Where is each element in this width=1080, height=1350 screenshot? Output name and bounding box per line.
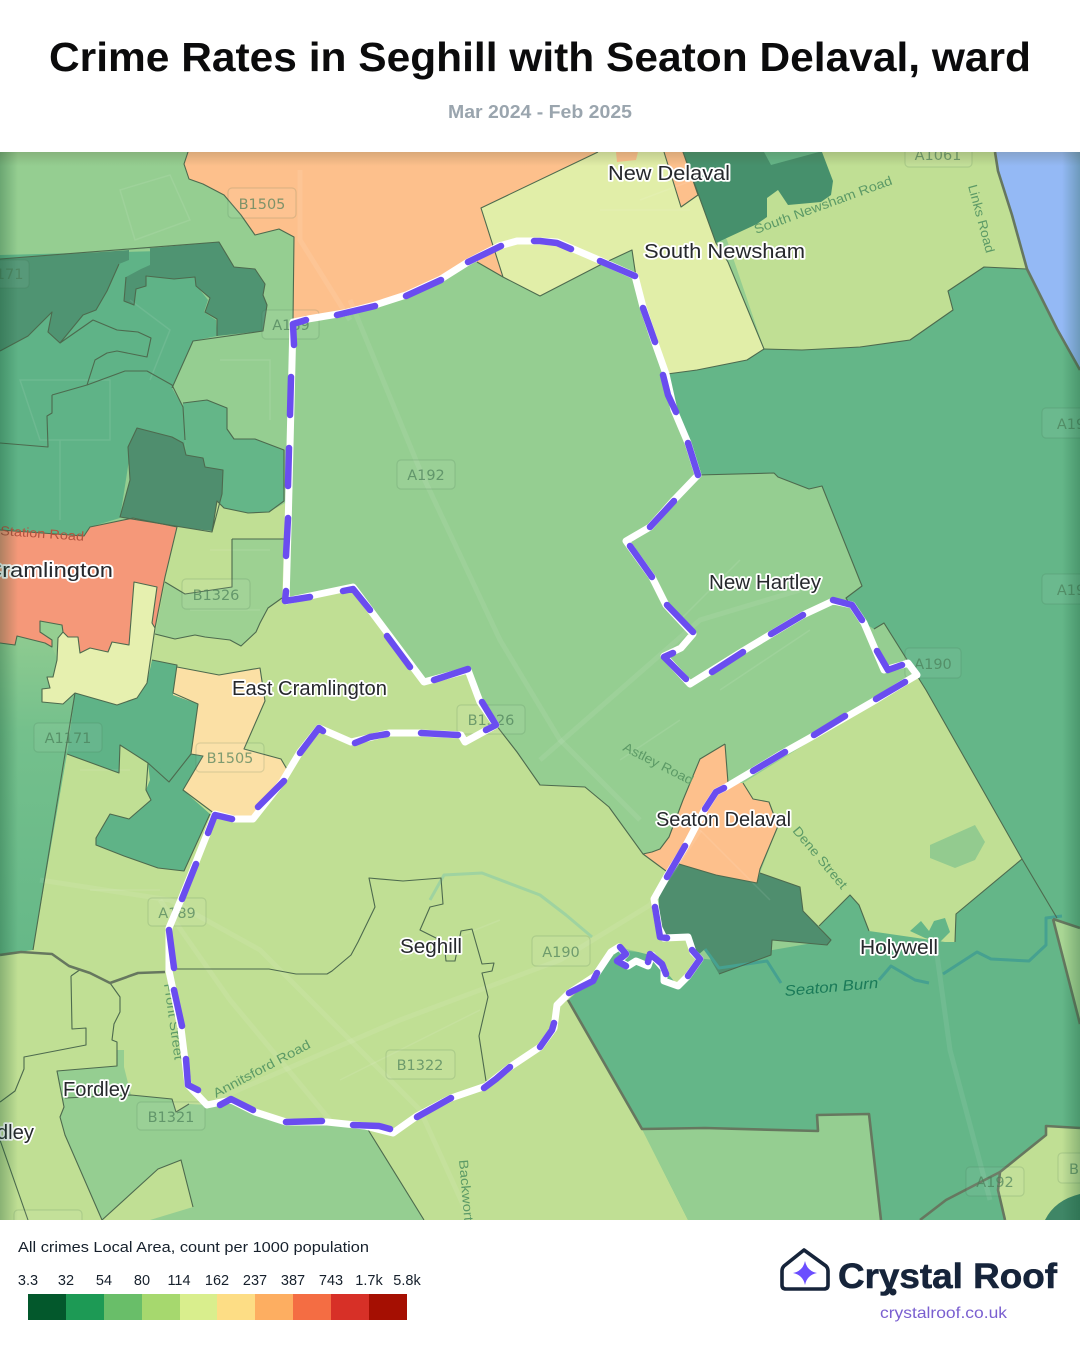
- east edge pale patch: [1055, 921, 1080, 1018]
- place labels: New Hartley: [709, 572, 821, 594]
- north-east pale area: [726, 152, 1026, 350]
- legend: [18, 1240, 421, 1320]
- legend title: All crimes Local Area, count per 1000 population: [18, 1240, 369, 1256]
- rivers: [430, 873, 1062, 983]
- title: Crime Rates in Seghill with Seaton Delaval, ward: [49, 34, 1031, 80]
- north-west dark green: [0, 242, 267, 351]
- road number shields: A189: [158, 906, 196, 922]
- road number shields: A192: [976, 1175, 1014, 1191]
- road number shields: B1321: [148, 1110, 194, 1126]
- legend scale labels: [18, 1273, 421, 1289]
- Seghill ward and western pale green: [0, 501, 700, 1220]
- wordmark: Crystal Roof: [838, 1257, 1057, 1296]
- east green area: [568, 267, 1080, 1220]
- road number shields: B: [1069, 1162, 1079, 1178]
- road number shields: A190: [542, 945, 580, 961]
- road number shields: A189: [272, 318, 310, 334]
- Cramlington dark green block: [120, 428, 223, 532]
- lake near Holywell: [930, 825, 985, 868]
- Cramlington medium green block: [183, 400, 284, 512]
- icon: house with star: [782, 1250, 828, 1289]
- dark corner patch: [1045, 1194, 1080, 1220]
- road name labels: [0, 173, 998, 1230]
- road name labels: Annitsford Road: [210, 1037, 313, 1101]
- legend colour bar: [28, 1294, 407, 1320]
- legend scale labels: 387: [281, 1273, 305, 1289]
- place labels: South Newsham: [644, 241, 805, 263]
- road name labels: Links Road: [965, 183, 998, 254]
- cream area East Cramlington: [173, 667, 288, 818]
- road number shields: B1505: [207, 751, 253, 767]
- north orange area: [184, 152, 598, 322]
- road name labels: Seaton Burn: [784, 975, 879, 1000]
- light green Cramlington block: [155, 539, 284, 646]
- road name labels: South Newsham Road: [752, 173, 894, 237]
- north-east dark green area: [683, 152, 833, 243]
- boundary lines: [0, 152, 1080, 1220]
- place labels: Holywell: [860, 937, 938, 959]
- subtitle: date range: Mar 2024 - Feb 2025: [448, 102, 632, 122]
- road number shields: B1505: [239, 197, 285, 213]
- road number shields: A1061: [915, 148, 961, 164]
- place labels: East Cramlington: [232, 678, 387, 700]
- ward boundary: purple dashes: [169, 241, 905, 1129]
- map base area: [0, 152, 912, 1220]
- Holywell patches: [910, 918, 950, 942]
- legend scale labels: 237: [243, 1273, 267, 1289]
- roads and tracks: [40, 170, 990, 1220]
- east pale green: [743, 675, 1022, 942]
- west medium green column: [0, 636, 76, 955]
- South Newsham pale area: [481, 152, 764, 374]
- road number shields: A190: [914, 657, 952, 673]
- road name labels: Station Road: [0, 523, 85, 544]
- website address: crystalroof.co.uk: [880, 1305, 1008, 1322]
- road name labels: Dene Street: [790, 823, 851, 892]
- road number shields: B1322: [397, 1058, 443, 1074]
- legend scale labels: 54: [96, 1273, 112, 1289]
- Cramlington salmon area: [0, 518, 177, 653]
- legend scale labels: 114: [167, 1273, 191, 1289]
- legend scale labels: 80: [134, 1273, 150, 1289]
- south-east pale block: [998, 1126, 1080, 1220]
- road number shields: B1326: [468, 713, 514, 729]
- legend scale labels: 743: [319, 1273, 343, 1289]
- road number shields: A192: [407, 468, 445, 484]
- road name labels: Astley Road: [621, 739, 696, 788]
- legend scale labels: 5.8k: [393, 1273, 421, 1289]
- place labels: Seghill: [400, 936, 462, 958]
- south-west pale block: [102, 1160, 193, 1220]
- map edge shading: [0, 152, 1080, 1220]
- Seaton Delaval orange area: [643, 744, 778, 883]
- road name labels: Front Street: [161, 982, 187, 1061]
- medium green block by B1505: [96, 754, 210, 871]
- ward boundary: white base: [169, 241, 917, 1133]
- New Delaval orange slivers: [664, 152, 698, 207]
- road number shields: A1171: [45, 731, 91, 747]
- wordmark key dot: [890, 1288, 896, 1296]
- legend scale labels: 32: [58, 1273, 74, 1289]
- legend scale labels: 162: [205, 1273, 229, 1289]
- sea: [995, 152, 1080, 370]
- north-west medium green: [0, 250, 217, 536]
- legend scale labels: 3.3: [18, 1273, 38, 1289]
- Seaton Delaval dark green area: [659, 864, 831, 974]
- legend scale labels: 1.7k: [355, 1273, 383, 1289]
- very pale Cramlington area: [42, 582, 157, 705]
- place labels: Fordley: [63, 1079, 130, 1101]
- place labels: New Delaval: [608, 163, 730, 185]
- logo: Crystal Roof: [782, 1250, 1057, 1322]
- place labels: [0, 163, 938, 1144]
- road number shields: B1326: [193, 588, 239, 604]
- streets texture: [20, 170, 810, 1080]
- place labels: Seaton Delaval: [656, 809, 791, 831]
- A1171 medium green block: [67, 660, 198, 782]
- light green south block: [642, 1114, 881, 1220]
- road name labels: Backworth: [456, 1159, 477, 1230]
